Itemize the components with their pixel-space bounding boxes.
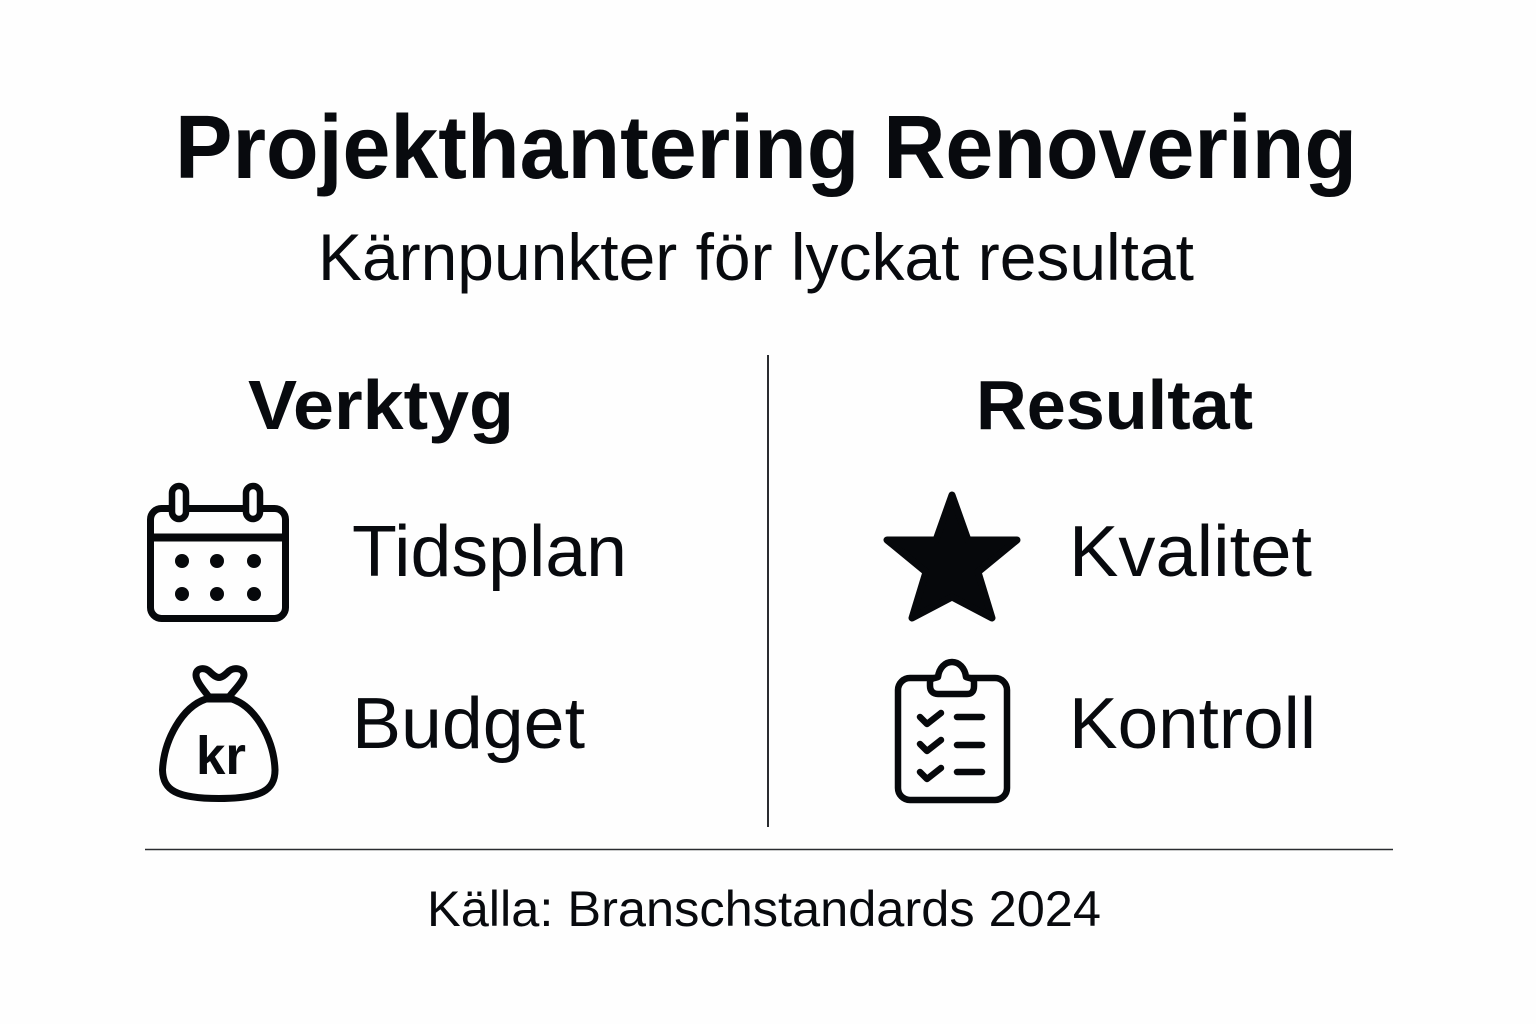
source: Källa: Branschstandards 2024 <box>427 881 1101 937</box>
icon: money bag <box>162 669 275 798</box>
panel: Resultat <box>887 366 1316 800</box>
heading: Resultat: Resultat <box>976 366 1253 444</box>
label: Kvalitet: Kvalitet <box>1069 512 1312 592</box>
label: Budget: Budget <box>352 684 585 764</box>
panel: Verktyg <box>150 366 627 798</box>
icon: star <box>887 495 1017 618</box>
heading: Verktyg: Verktyg <box>248 366 514 444</box>
label: Tidsplan: Tidsplan <box>352 512 627 592</box>
label: Kontroll: Kontroll <box>1069 684 1316 764</box>
icon: calendar <box>150 486 286 618</box>
icon: clipboard checklist <box>898 662 1007 800</box>
subtitle: Kärnpunkter för lyckat resultat <box>318 220 1194 294</box>
icon: money bag: kr <box>196 726 246 786</box>
title: Projekthantering Renovering <box>175 98 1357 198</box>
